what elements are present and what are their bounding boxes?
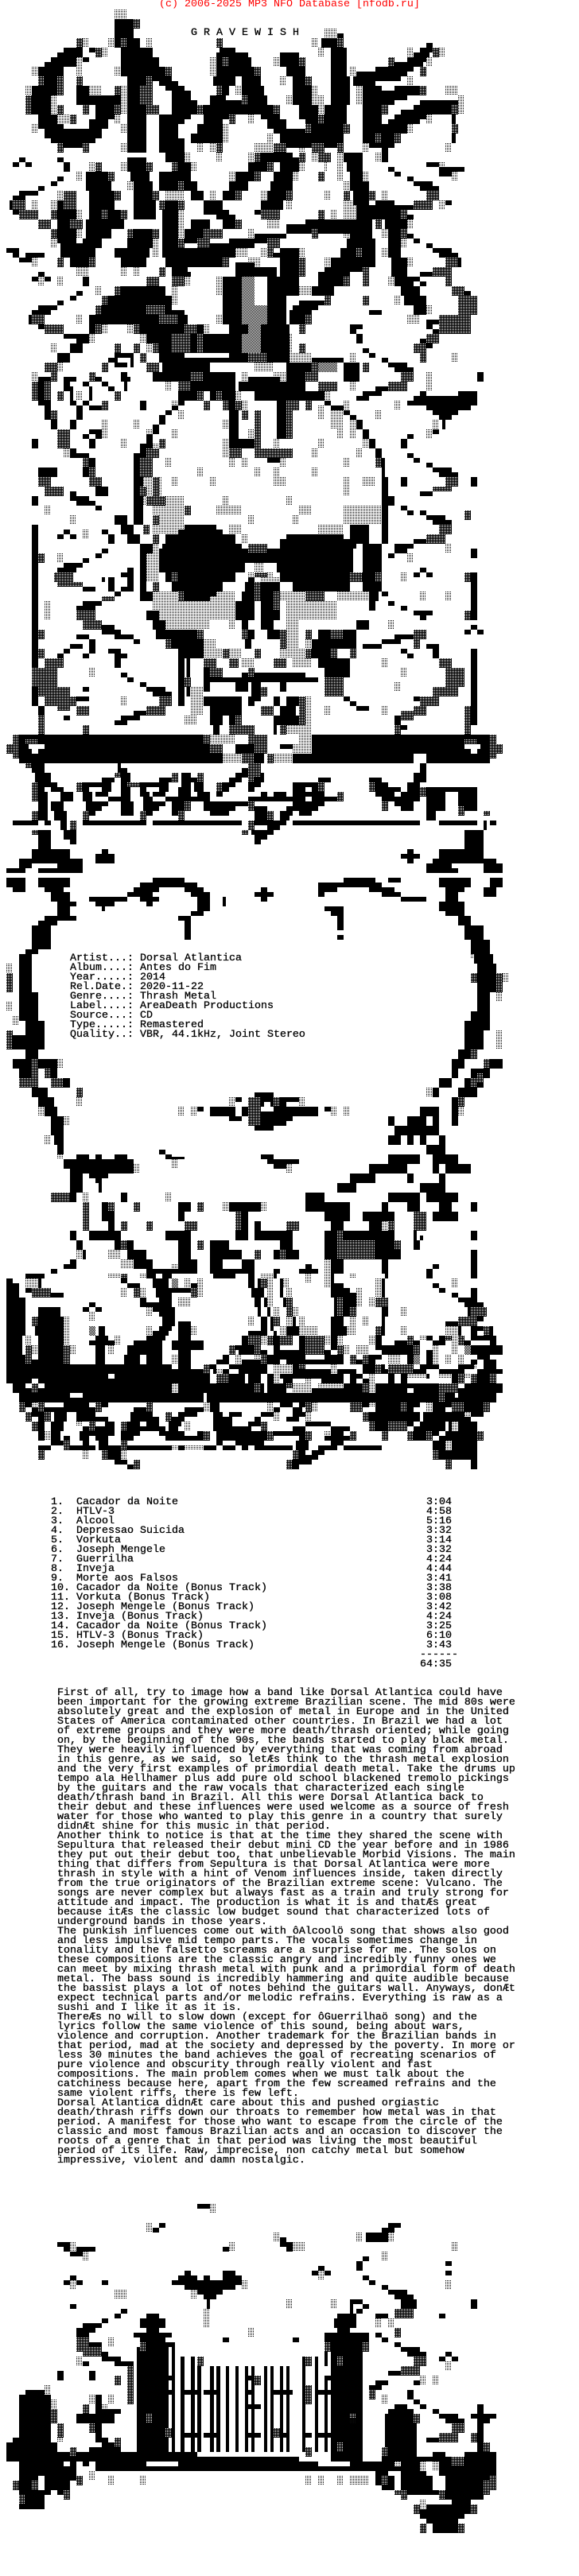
graveyard scene with tree, tombstones and crosses xyxy=(6,1107,503,1379)
release info block: Artist...: Dorsal Atlantica Album....: Antes do Fim Year.....: 2014 Rel.Date.: 2020-11-22 Genre....: Thrash Metal Label....: AreaDeath Productions Source...: CD Type.....: Remastered Quality..: VBR, 44.1kHz, Joint Stereo xyxy=(70,952,305,1041)
decorative ribbons and crosses beside skull xyxy=(32,477,484,735)
skull face with eyes, nose and teeth xyxy=(115,477,394,763)
bottom art: tombstones, crosses and ground xyxy=(6,2385,496,2533)
ornate frame around info block xyxy=(6,830,509,1202)
group tag: GRAVEWISH: G R A V E W I S H xyxy=(191,27,299,39)
bottom art: cemetery gate with posts and bars xyxy=(134,2299,369,2457)
track names: 1. Cacador da Noite 2. HTLV-3 3. Alcool 4. Depressao Suicida 5. Vorkuta 6. Joseph Mengele 7. Guerrilha 8. Inveja 9. Morte aos Falsos 10. Cacador da Noite (Bonus Track) 11. Vorkuta (Bonus Track) 12. Joseph Mengele (Bonus Track) 13. Inveja (Bonus Track) 14. Cacador da Noite (Bonus Track) 15. HTLV-3 (Bonus Track) 16. Joseph Mengele (Bonus Track) xyxy=(51,1496,267,1651)
horizontal band across skull base xyxy=(6,735,503,763)
bottom art: birds, bat and ribbons in sky xyxy=(45,2204,477,2442)
Release NFO banner lettering xyxy=(13,763,496,844)
track list xyxy=(51,1496,458,1670)
track times and total: 3:04 4:58 5:16 3:32 3:14 3:32 4:24 4:44 3:41 3:38 3:08 3:42 4:24 3:25 6:10 3:43 ------ 64:35 xyxy=(420,1496,458,1670)
skull crown, hair and side ribbons xyxy=(32,248,484,477)
review text: First of all, try to image how a band like Dorsal Atlantica could have been important for the growing extreme Brazilian scene. The mid 80s were absolutely great and the explosion of metal in Europe and in the United States of America contaminated other countries. In Brazil we had a lot of extreme groups and they were more death/thrash oriented; while going on, by the beginning of the 90s, the bands started to play black metal. They were heavily influenced by everything that was coming from abroad in this genre, as we said, so letÆs think to the thrash metal explosion and the very first examples of primordial death metal. Take the drums up tempo ala Hellhamer plus add pure old school blackened tremolo pickings by the guitars and the raw vocals that characterized each single death/thrash band in Brazil. All this were Dorsal Atlantica back to their debut and these influences were used welcome as a source of fresh water for those who wanted to play this genre in a country that surely didnÆt shine for this music in that period. Another think to notice is that at the time they shared the scene with Sepultura that released their debut mini CD the year before and in 1986 they put out their debut too, that unbelievable Morbid Visions. The main thing that differs from Sepultura is that Dorsal Atlantica were more thrash in style with a hint of Venom influences inside, taken directly from the true originators of the Brazilian extreme scene: Vulcano. The songs are never complex but always fast as a train and truly strong for attitude and impact. The production is what it is and thatÆs great because itÆs the classic low budget sound that characterized lots of underground bands in those years. The punkish influences come out with ôAlcoolö song that shows also good and less impulsive mid tempo parts. The vocals sometimes change in tonality and the falsetto screams are a surprise for me. The solos on these compositions are the classic angry and incredibly funny ones we can meet by mixing thrash metal with punk and a primordial form of death metal. The bass sound is incredibly hammering and quite audible because the bassist plays a lot of notes behind the guitars wall. Anyways, donÆt expect technical parts and/or melodic refrains. Everything is raw as a sushi and I like it as it is. ThereÆs no will to slow down (except for ôGuerrilhaö song) and the lyrics follow the same violence of this sound, being about wars, violence and corruption. Another trademark for the Brazilian bands in that period, mad at the society and depressed by the poverty. In more or less 30 minutes the band achieves the goal of recreating scenarios of pure violence and obscurity through really violent and fast compositions. The main problem comes when we must talk about the catchiness because here, apart from the few screamed refrains and the same violent riffs, there is few left. Dorsal Atlantica didnÆt care about this and pushed orgiastic death/thrash riffs down our throats to remember how metal was in that period. A manifest for those who want to escape from the circle of the classic and most famous Brazilian acts and an occasion to discover the roots of a genre that in that period was living the most beautiful period of its life. Raw, imprecise, non catchy metal but somehow impressive, violent and damn nostalgic. xyxy=(57,1687,515,2167)
logo art: WISH lettering xyxy=(6,148,471,348)
graveyard ground band xyxy=(6,1379,503,1469)
logo art: GRAVE lettering xyxy=(25,10,464,229)
